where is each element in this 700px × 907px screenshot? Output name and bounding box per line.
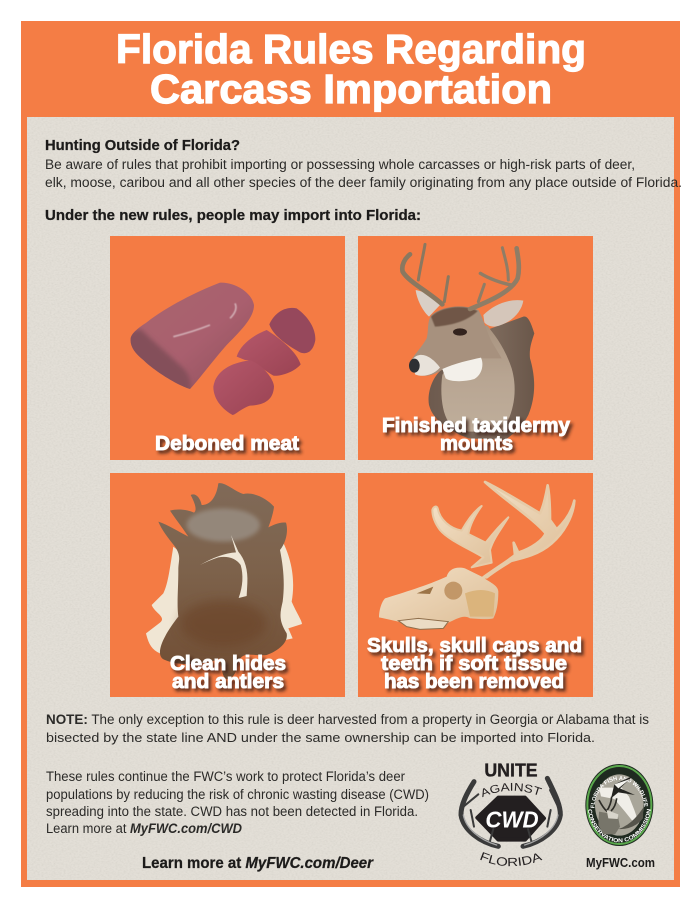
note text block bbox=[46, 712, 649, 745]
intro text block: elk, moose, caribou and all other species of the deer family originating from any place outside of Florida. bbox=[45, 175, 682, 190]
left antler bbox=[461, 782, 498, 846]
closing text block bbox=[46, 769, 429, 836]
intro text block: Hunting Outside of Florida? bbox=[45, 138, 240, 154]
icon: deer hide with antler bbox=[146, 483, 302, 679]
logo: Unite Against CWD: AGAINST bbox=[482, 782, 542, 798]
logo: FWC seal: CONSERVATION COMMISSION bbox=[588, 809, 651, 842]
caption bbox=[367, 635, 582, 693]
icon: deer head mount bbox=[402, 244, 534, 440]
caption: Finished taxidermy bbox=[382, 415, 571, 437]
closing text block: These rules continue the FWC’s work to protect Florida’s deer bbox=[46, 769, 405, 784]
logo: Unite Against CWD: CWD bbox=[485, 807, 539, 833]
closing text block: populations by reducing the risk of chronic wasting disease (CWD) bbox=[46, 787, 429, 802]
icon: deboned meat cuts bbox=[123, 283, 315, 415]
intro text block: Be aware of rules that prohibit importing or possessing whole carcasses or high-risk parts of deer, bbox=[45, 157, 635, 172]
logo: Unite Against CWD bbox=[458, 760, 563, 866]
logo caption: MyFWC.com: MyFWC.com bbox=[586, 855, 655, 870]
intro text block bbox=[45, 138, 682, 190]
title: Florida Rules Regarding bbox=[116, 26, 586, 72]
front antler bbox=[483, 482, 574, 577]
note text block: NOTE: The only exception to this rule is deer harvested from a property in Georgia or Alabama that is bbox=[46, 712, 649, 727]
title bbox=[116, 26, 586, 112]
caption: Clean hides bbox=[170, 653, 286, 675]
title: Carcass Importation bbox=[150, 66, 552, 112]
caption: has been removed bbox=[384, 671, 564, 693]
caption bbox=[382, 415, 571, 455]
panel: hides and antlers bbox=[110, 473, 345, 697]
logo: FWC seal: FLORIDA FISH AND WILDLIFE bbox=[590, 776, 648, 808]
logo: Unite Against CWD: FLORIDA bbox=[480, 852, 542, 866]
caption bbox=[170, 653, 286, 693]
back antler bbox=[432, 506, 508, 567]
caption: Deboned meat bbox=[155, 433, 299, 455]
left antler bbox=[402, 244, 448, 304]
panel: deboned meat bbox=[110, 236, 345, 460]
panel: taxidermy mounts bbox=[358, 236, 593, 460]
logo: FWC seal bbox=[585, 764, 654, 846]
subheading: Under the new rules, people may import into Florida: bbox=[45, 208, 421, 224]
closing text block: Learn more at MyFWC.com/CWD bbox=[46, 821, 242, 836]
caption: Skulls, skull caps and bbox=[367, 635, 582, 657]
canvas texture panel bbox=[27, 117, 674, 880]
caption: and antlers bbox=[172, 671, 284, 693]
caption: mounts bbox=[440, 433, 513, 455]
caption: teeth if soft tissue bbox=[381, 653, 567, 675]
panel: skulls bbox=[358, 473, 593, 697]
skull bbox=[379, 568, 498, 629]
right antler bbox=[470, 248, 519, 309]
learn more link: Learn more at MyFWC.com/Deer bbox=[142, 855, 374, 872]
icon: deer skull with antlers bbox=[379, 482, 574, 629]
logo: Unite Against CWD: UNITE bbox=[484, 760, 538, 781]
right antler bbox=[523, 778, 560, 846]
note text block: bisected by the state line AND under the same ownership can be imported into Florida. bbox=[46, 730, 595, 745]
closing text block: spreading into the state. CWD has not been detected in Florida. bbox=[46, 804, 418, 819]
